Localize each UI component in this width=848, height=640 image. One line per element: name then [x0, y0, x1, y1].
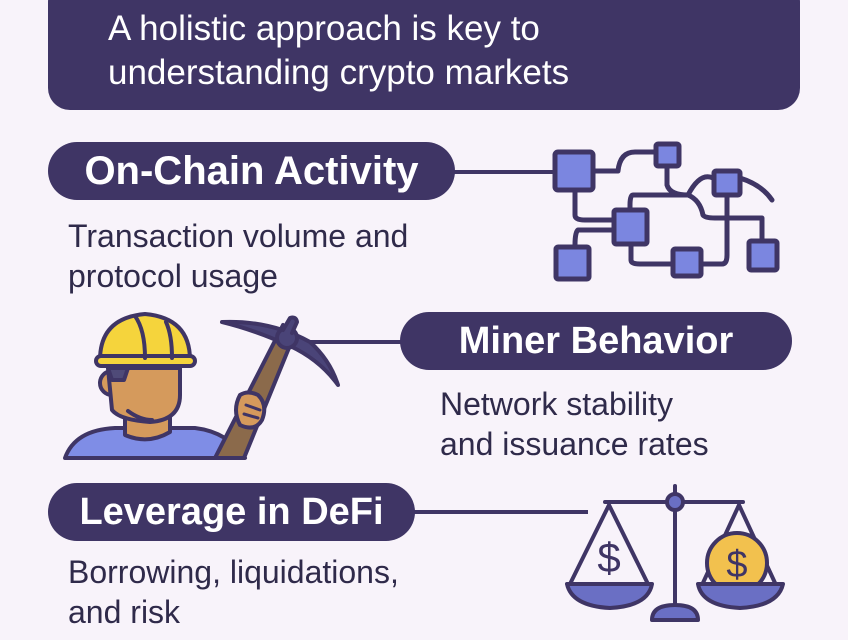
heading: On-Chain Activity: On-Chain Activity [84, 148, 419, 192]
heading: Leverage in DeFi [48, 483, 415, 541]
text: miner description: and issuance rates [440, 426, 709, 462]
banner: header: A holistic approach is key to [108, 9, 540, 48]
text: leverage description: and risk [68, 594, 180, 630]
heading: On-Chain Activity [48, 142, 455, 200]
text: on-chain description: Transaction volume and [68, 218, 408, 254]
icon: balance scale: $ [597, 534, 621, 581]
text: miner description: Network stability [440, 386, 673, 422]
heading: Miner Behavior [400, 312, 792, 370]
text: leverage description [68, 554, 399, 630]
text: on-chain description [68, 218, 408, 294]
banner: header [48, 0, 800, 110]
heading: Leverage in DeFi: Leverage in DeFi [79, 490, 384, 532]
banner: header: understanding crypto markets [108, 53, 569, 92]
text: on-chain description: protocol usage [68, 258, 278, 294]
text: leverage description: Borrowing, liquidations, [68, 554, 399, 590]
text: miner description [440, 386, 709, 462]
heading: Miner Behavior: Miner Behavior [459, 320, 733, 362]
icon: balance scale: $ [726, 544, 748, 586]
